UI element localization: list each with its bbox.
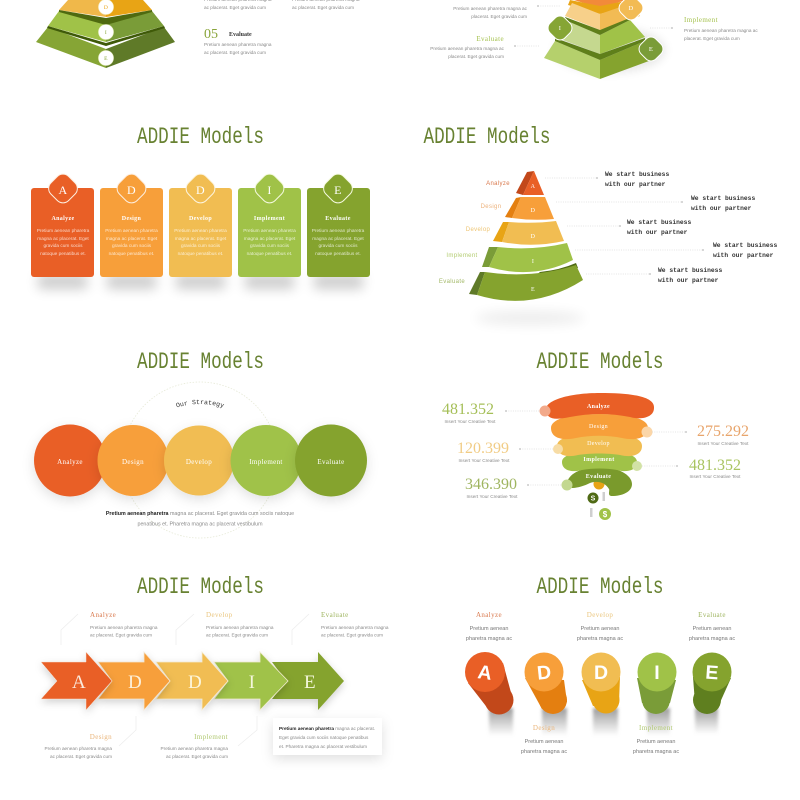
- segment labels: Develop: [466, 227, 491, 233]
- card: Evaluate: Evaluate: [325, 216, 351, 222]
- card: Develop: D: [196, 183, 205, 197]
- list texts: ac placerat. Eget gravida cum: [204, 5, 266, 10]
- title: ADDIE Models: [424, 124, 550, 150]
- label: Develop text: placerat. Eget gravida cum: [471, 14, 527, 19]
- panel: 3D cylinders: [465, 611, 735, 755]
- card: Analyze: [31, 171, 94, 277]
- label: Evaluate: Evaluate: [476, 35, 504, 43]
- label: Develop: Develop: [587, 611, 613, 619]
- card: Evaluate: Pretium aenean pharetra: [312, 228, 365, 234]
- label: Design: Design: [533, 724, 555, 732]
- segment I: I: [532, 259, 534, 265]
- label: Evaluate: placerat. Eget gravida cum: [448, 54, 504, 59]
- label: Implement: ac placerat. Eget gravida cum: [166, 754, 228, 759]
- card: Implement: magna ac placerat. Eget: [244, 236, 296, 242]
- label: Implement: Pretium aenean pharetra magna: [160, 746, 228, 751]
- badge D: D: [628, 5, 634, 12]
- card shadows: [38, 274, 363, 289]
- list texts: 05: [204, 27, 218, 42]
- arrow D: D: [188, 672, 202, 693]
- label: Develop: Develop: [206, 611, 233, 619]
- right captions: We start business: [658, 267, 722, 274]
- circle: Analyze: [34, 424, 106, 496]
- label: Implement: [160, 733, 228, 759]
- right captions: with our partner: [691, 205, 752, 212]
- label: Analyze: Pretium aenean pharetra magna: [90, 625, 158, 630]
- label: Develop: ac placerat. Eget gravida cum: [206, 632, 268, 638]
- panel: stacked pyramid with numbered list: [36, 0, 360, 68]
- funnel: Evaluate: Evaluate: [586, 474, 611, 480]
- label: Implement: Implement: [639, 724, 673, 732]
- funnel: Design: [551, 414, 648, 439]
- right captions: We start business: [691, 195, 755, 202]
- circle: Evaluate: [295, 424, 367, 496]
- right captions: with our partner: [713, 252, 774, 259]
- label: Develop text: Pretium aenean pharetra magna ac: [453, 6, 528, 11]
- segment labels: Analyze: [486, 181, 510, 187]
- funnel: Develop: [557, 434, 642, 456]
- right captions: We start business: [627, 219, 691, 226]
- card: Implement: I: [267, 183, 272, 197]
- cylinder E: E: [705, 662, 719, 684]
- card: Develop: [169, 171, 232, 277]
- label: Develop: [577, 611, 623, 642]
- caption: Pretium aenean pharetra magna ac placerat. Eget gravida cum sociis natoque: [106, 511, 294, 517]
- title: ADDIE Models: [137, 124, 264, 150]
- cylinder D: [582, 652, 620, 714]
- pyramid letter badges: I: [105, 30, 107, 36]
- funnel: Develop: Develop: [587, 441, 610, 447]
- panel: five ADDIE cards: [31, 171, 370, 289]
- pyramid top layers: [565, 0, 640, 30]
- card: Develop: magna ac placerat. Eget: [175, 236, 227, 242]
- card: Develop: Develop: [189, 216, 212, 222]
- badge I: I: [559, 25, 561, 32]
- card: Design: magna ac placerat. Eget: [106, 236, 158, 242]
- segment labels: Implement: [446, 253, 478, 259]
- label: Analyze: [466, 611, 512, 642]
- funnel: Implement: Implement: [583, 457, 615, 463]
- label: Evaluate: Pretium aenean pharetra magna ac: [430, 46, 505, 51]
- label: Design: [521, 724, 567, 755]
- right captions: [605, 171, 777, 284]
- card: Implement: gravida cum sociis: [250, 243, 290, 249]
- label: Analyze: [90, 611, 158, 638]
- label: Implement: Pretium aenean: [637, 739, 675, 745]
- label: Evaluate: Pretium aenean pharetra magna: [321, 625, 389, 630]
- circle: Design: [98, 425, 168, 496]
- panel: funnel with numbers: [442, 393, 749, 520]
- card: Evaluate: magna ac placerat. Eget: [312, 236, 364, 242]
- card: Analyze: gravida cum sociis: [43, 243, 83, 249]
- card: Analyze: Analyze: [51, 216, 75, 222]
- badge I: [545, 13, 575, 43]
- connector lines: [61, 614, 309, 746]
- circle: Develop: [164, 426, 234, 496]
- panel: pyramid with side labels: [430, 0, 758, 79]
- dotted ring: [122, 382, 278, 538]
- panel: 3D segmented cone: [439, 171, 777, 325]
- list texts: [204, 0, 360, 55]
- card: Design: D: [127, 183, 136, 197]
- label: Develop: Pretium aenean: [581, 626, 619, 632]
- label: Design: Design: [90, 733, 112, 741]
- circle: Analyze: Analyze: [57, 458, 83, 466]
- card: Design: Pretium aenean pharetra: [105, 228, 158, 234]
- card: Design: Design: [122, 216, 142, 222]
- label: Analyze: pharetra magna ac: [466, 636, 512, 642]
- list texts: ac placerat. Eget gravida cum: [204, 50, 266, 55]
- segment labels: Design: [481, 204, 501, 210]
- badge D: [616, 0, 646, 23]
- title: ADDIE Models: [137, 349, 264, 375]
- note box: Pretium aenean pharetra magna ac placerat.: [279, 726, 375, 731]
- label: Analyze: Analyze: [476, 611, 502, 619]
- segment E: [469, 263, 583, 301]
- label: Develop: pharetra magna ac: [577, 636, 623, 642]
- circle: Implement: [230, 425, 302, 496]
- cylinder shadows: [489, 708, 718, 736]
- card: Design: natoque penatibus et.: [109, 251, 154, 257]
- segment A: A: [531, 184, 536, 190]
- segment labels: [439, 181, 510, 285]
- arrow A: [41, 652, 112, 710]
- label: Design: Pretium aenean pharetra magna: [44, 746, 112, 751]
- label: Evaluate: Evaluate: [698, 611, 726, 619]
- cylinder I: [637, 652, 676, 714]
- funnel: Evaluate: [567, 467, 632, 496]
- label: Implement: Pretium aenean pharetra magna ac: [684, 28, 758, 33]
- list texts: ac placerat. Eget gravida cum: [292, 5, 354, 10]
- pyramid bottom layer: [36, 26, 175, 68]
- caption: [106, 511, 294, 528]
- title: ADDIE Models: [137, 574, 264, 600]
- label: Evaluate: ac placerat. Eget gravida cum: [321, 632, 383, 638]
- circle: Evaluate: Evaluate: [317, 458, 345, 466]
- circle: Develop: Develop: [186, 458, 212, 466]
- card: Analyze: Pretium aenean pharetra: [37, 228, 90, 234]
- arrow D: [98, 652, 170, 710]
- cylinder A: A: [476, 661, 493, 685]
- pyramid top layer: [59, 0, 152, 17]
- curved heading: Our Strategy: [176, 400, 224, 408]
- stat 346.390: 346.390: [465, 476, 517, 493]
- pyramid middle layer: [48, 10, 164, 42]
- note box: [273, 718, 382, 755]
- segment D: D: [531, 234, 536, 240]
- funnel: Implement: [562, 451, 637, 471]
- stat 275.292: 275.292: [697, 423, 749, 440]
- stat 481.352: 481.352: [689, 457, 741, 474]
- card: Implement: natoque penatibus et.: [247, 251, 292, 257]
- label: Implement: placerat. Eget gravida cum: [684, 36, 740, 41]
- pyramid letter badges: E: [104, 56, 108, 62]
- card: Evaluate: [307, 171, 370, 277]
- pyramid green layer: [555, 17, 645, 54]
- label: Evaluate: [430, 35, 540, 59]
- label: Evaluate: Evaluate: [321, 611, 349, 619]
- badge E: [636, 34, 666, 64]
- card: Design: gravida cum sociis: [112, 243, 152, 249]
- pyramid letter badges: [98, 0, 114, 66]
- list texts: Pretium aenean pharetra magna: [204, 42, 272, 47]
- card: Develop: Pretium aenean pharetra: [174, 228, 227, 234]
- label: Design: ac placerat. Eget gravida cum: [50, 754, 112, 759]
- title: ADDIE Models: [536, 349, 664, 375]
- cone shadow: [475, 311, 585, 325]
- stat 120.399: 120.399: [457, 440, 509, 457]
- segment D: [493, 221, 564, 245]
- label: Evaluate: [689, 611, 735, 642]
- pyramid letter badges: D: [104, 5, 108, 11]
- segment labels: Evaluate: [439, 279, 465, 285]
- label: Design: [44, 733, 112, 759]
- arrow D: [156, 652, 228, 710]
- pyramid shadow: [555, 28, 665, 72]
- funnel small icons: $: [603, 510, 608, 519]
- segment A: [516, 171, 544, 195]
- label: Develop: Pretium aenean pharetra magna: [206, 625, 274, 630]
- arrow I: [214, 652, 288, 710]
- card: Analyze: A: [58, 183, 68, 197]
- circle: Design: Design: [122, 458, 144, 466]
- cylinder A: [465, 652, 514, 714]
- right captions: with our partner: [627, 229, 688, 236]
- stat 481.352: 481.352: [442, 401, 494, 418]
- segment E: E: [531, 287, 535, 293]
- leader lines: [545, 177, 704, 275]
- arrow A: A: [72, 672, 86, 693]
- card: Develop: natoque penatibus et.: [178, 251, 223, 257]
- card: Analyze: natoque penatibus et.: [40, 251, 86, 257]
- card: Evaluate: gravida cum sociis: [318, 243, 358, 249]
- stat 275.292: Insert Your Creative Text: [698, 441, 749, 446]
- title: ADDIE Models: [536, 574, 664, 600]
- stat 481.352: Insert Your Creative Text: [690, 474, 741, 479]
- arrow D: D: [128, 672, 142, 693]
- label: Design: pharetra magna ac: [521, 749, 567, 755]
- segment D: D: [531, 208, 536, 214]
- card: Evaluate: natoque penatibus et.: [315, 251, 361, 257]
- segment I: [482, 243, 573, 272]
- label: Implement: pharetra magna ac: [633, 749, 679, 755]
- caption: penatibus et. Pharetra magna ac placerat vestibulum: [137, 522, 263, 528]
- funnel: Analyze: Analyze: [587, 404, 610, 410]
- list texts: Evaluate: [229, 32, 252, 38]
- stat 120.399: Insert Your Creative Text: [459, 458, 510, 463]
- label: Implement: [633, 724, 679, 755]
- card: Evaluate: E: [334, 183, 342, 197]
- label: Implement: Implement: [194, 733, 228, 741]
- note box: Eget gravida cum sociis natoque penatibus: [279, 735, 369, 740]
- card: Implement: Implement: [254, 216, 285, 222]
- pyramid bottom layer: [544, 38, 657, 79]
- stat 481.352: Insert Your Creative Text: [445, 419, 496, 424]
- segment D: [505, 197, 554, 220]
- funnel small icons: S: [591, 496, 596, 502]
- cylinder I: I: [654, 662, 660, 684]
- right captions: We start business: [605, 171, 669, 178]
- arrow E: [272, 652, 344, 710]
- card: Design: [100, 171, 163, 277]
- circle: Implement: Implement: [249, 458, 283, 466]
- label: Evaluate: [321, 611, 389, 638]
- cylinder D: D: [536, 661, 552, 685]
- funnel: Analyze: [546, 393, 654, 419]
- label: Analyze: Analyze: [90, 611, 116, 619]
- label: Implement: Implement: [684, 16, 718, 24]
- label: Design: Pretium aenean: [525, 739, 563, 745]
- label: Analyze: ac placerat. Eget gravida cum: [90, 632, 152, 638]
- right captions: with our partner: [605, 181, 666, 188]
- funnel: Design: Design: [589, 424, 608, 430]
- arrow I: I: [249, 672, 255, 693]
- card: Implement: [238, 171, 301, 277]
- funnel small icons: [588, 478, 611, 520]
- cylinder E: [692, 652, 732, 714]
- panel: overlapping circles: [31, 382, 370, 538]
- label: Analyze: Pretium aenean: [470, 626, 508, 632]
- cylinder D: D: [594, 662, 608, 684]
- cylinder D: [524, 652, 567, 714]
- label: Develop text: [453, 5, 561, 19]
- label: Develop: [206, 611, 274, 638]
- badge E: E: [649, 46, 653, 53]
- funnel leader lines: [505, 410, 687, 486]
- label: Evaluate: pharetra magna ac: [689, 636, 735, 642]
- note box: et. Pharetra magna ac placerat vestibulum: [279, 744, 367, 749]
- card: Implement: Pretium aenean pharetra: [243, 228, 296, 234]
- card: Analyze: magna ac placerat. Eget: [37, 236, 89, 242]
- right captions: with our partner: [658, 277, 719, 284]
- card: Develop: gravida cum sociis: [181, 243, 221, 249]
- panel: chevron arrows: [41, 611, 389, 759]
- right captions: We start business: [713, 242, 777, 249]
- label: Implement: [650, 16, 758, 41]
- stat 346.390: Insert Your Creative Text: [467, 494, 518, 499]
- funnel markers: [540, 406, 652, 490]
- label: Evaluate: Pretium aenean: [693, 626, 731, 632]
- arrow E: E: [304, 672, 316, 693]
